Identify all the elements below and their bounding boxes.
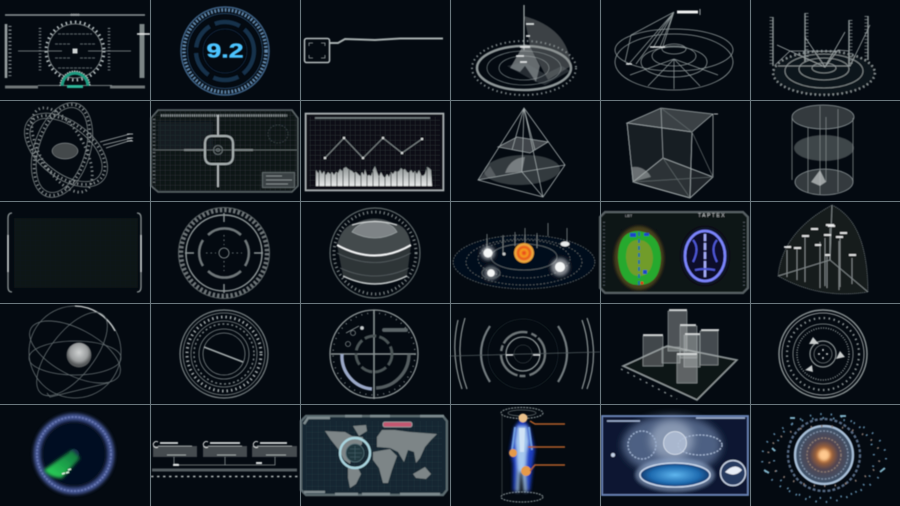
panel: blue circular score dial	[181, 7, 269, 95]
panel: green radar	[37, 417, 111, 491]
small globe	[720, 460, 746, 486]
score value: 9.2	[206, 40, 244, 62]
panel: concentric ring dial	[180, 310, 268, 398]
label: gauge top: 0000	[71, 12, 80, 17]
panel: radial disc with vertical scales	[771, 13, 875, 95]
panel: radar arcs	[450, 318, 600, 389]
panel: spherical octant with pins	[778, 205, 868, 294]
panel: wireframe pyramid	[478, 108, 565, 197]
panel: glowing core with scattered particles	[762, 414, 886, 502]
panel: wheel dial with triangles	[779, 310, 867, 398]
scan header: LBT	[625, 213, 633, 218]
panel: timeline with callouts	[151, 442, 298, 476]
panel: human body scan	[501, 408, 565, 502]
panel: flight HUD gauge	[5, 12, 150, 88]
bars	[316, 166, 432, 186]
panel: radial disc with spike and wedge	[472, 5, 576, 95]
panel: orbit sphere	[20, 301, 130, 407]
panel: target ring	[178, 208, 270, 298]
panel: 3D bar chart	[621, 310, 737, 400]
panel: empty bracket frame	[8, 213, 141, 292]
panel: brain scans	[600, 212, 748, 293]
panel: brain scans: TAPTEX	[698, 213, 726, 219]
panel: grid frame with crosshair	[151, 110, 298, 192]
blue platform	[635, 458, 715, 492]
sun	[514, 243, 534, 263]
blue brain	[683, 229, 727, 283]
panel: line and bar chart	[306, 114, 444, 190]
planets	[481, 242, 570, 280]
panel: layered sphere	[330, 208, 420, 298]
platforms	[501, 408, 543, 418]
continents	[325, 425, 437, 488]
panel: quadrant dial	[330, 310, 418, 399]
green brain	[614, 226, 664, 290]
panel: wireframe cylinder	[792, 105, 854, 195]
body	[509, 414, 535, 492]
radar sweep	[44, 450, 80, 478]
panel: wireframe cube	[627, 108, 718, 198]
panel: solar orbit diagram	[453, 223, 595, 289]
panel: holographic globe scene	[602, 415, 748, 495]
red tag	[383, 422, 412, 427]
chart line	[325, 138, 422, 158]
panel: world map	[301, 416, 447, 495]
location ring	[340, 438, 370, 468]
panel: ring wireframe torus	[11, 95, 133, 205]
panel: framed pointer with line	[304, 38, 443, 62]
panel: radial disc with leader lines	[615, 9, 733, 90]
